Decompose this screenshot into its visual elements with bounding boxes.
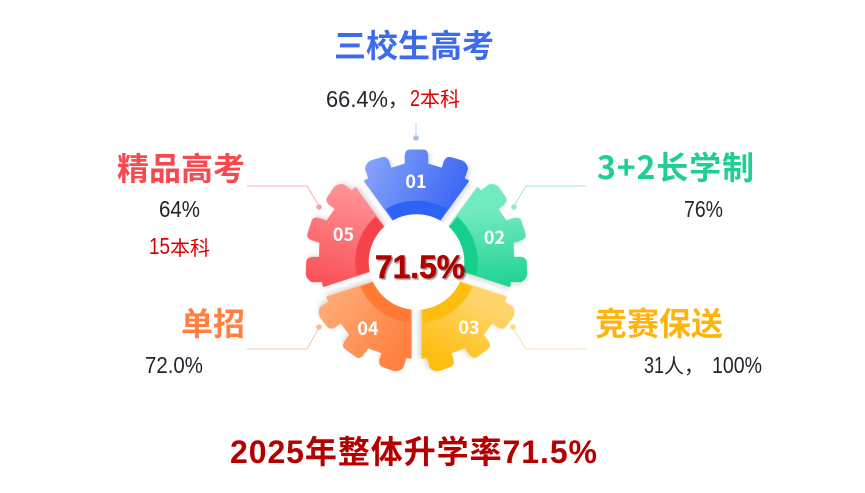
- gear segment 02: [440, 178, 539, 298]
- text: 31人，100%: 31: [644, 352, 664, 378]
- text: 76%: 76%: [684, 196, 723, 222]
- connector: 02: [511, 186, 586, 210]
- text: 15本科: [149, 233, 210, 260]
- text: 64%: 64%: [159, 196, 200, 222]
- gear segment 01: [365, 150, 468, 220]
- text: 2本科: [410, 85, 460, 111]
- number 05: 05: [333, 221, 354, 247]
- gear segment 04: [309, 265, 434, 383]
- number 02: 02: [484, 224, 505, 250]
- text: 2本科: 2: [410, 85, 420, 111]
- connector: 05: [247, 186, 322, 210]
- text: 15本科: 15: [149, 233, 170, 259]
- title: 3+2长学制: 3+2长学制: [597, 143, 754, 189]
- text: 66.4%: 66.4%: [326, 86, 388, 112]
- bottom headline: 2025年整体升学率71.5%: [230, 434, 597, 470]
- text: 15本科: 本科: [170, 237, 210, 260]
- text: comma: ，: [388, 89, 408, 111]
- title: 竞赛保送: 竞赛保送: [595, 299, 723, 345]
- text: 31人，100%: 100%: [712, 352, 762, 378]
- number 01: 01: [405, 168, 427, 194]
- number 04: 04: [357, 315, 379, 341]
- gear segment 05: [294, 178, 393, 298]
- gear segment 03: [399, 265, 524, 383]
- title: 精品高考: 精品高考: [117, 144, 245, 190]
- connector: 04: [247, 324, 322, 349]
- title: 单招: 单招: [181, 299, 245, 345]
- text: 31人，100%: [644, 352, 762, 378]
- connector: 01: [413, 123, 419, 141]
- title: 三校生高考: 三校生高考: [334, 21, 494, 67]
- text: 31人，100%: 人，: [664, 355, 704, 378]
- center value: 71.5%: [375, 249, 465, 285]
- connector: 03: [510, 324, 586, 349]
- text: 72.0%: 72.0%: [145, 352, 203, 378]
- number 03: 03: [458, 314, 480, 340]
- text: 2本科: 本科: [420, 88, 460, 111]
